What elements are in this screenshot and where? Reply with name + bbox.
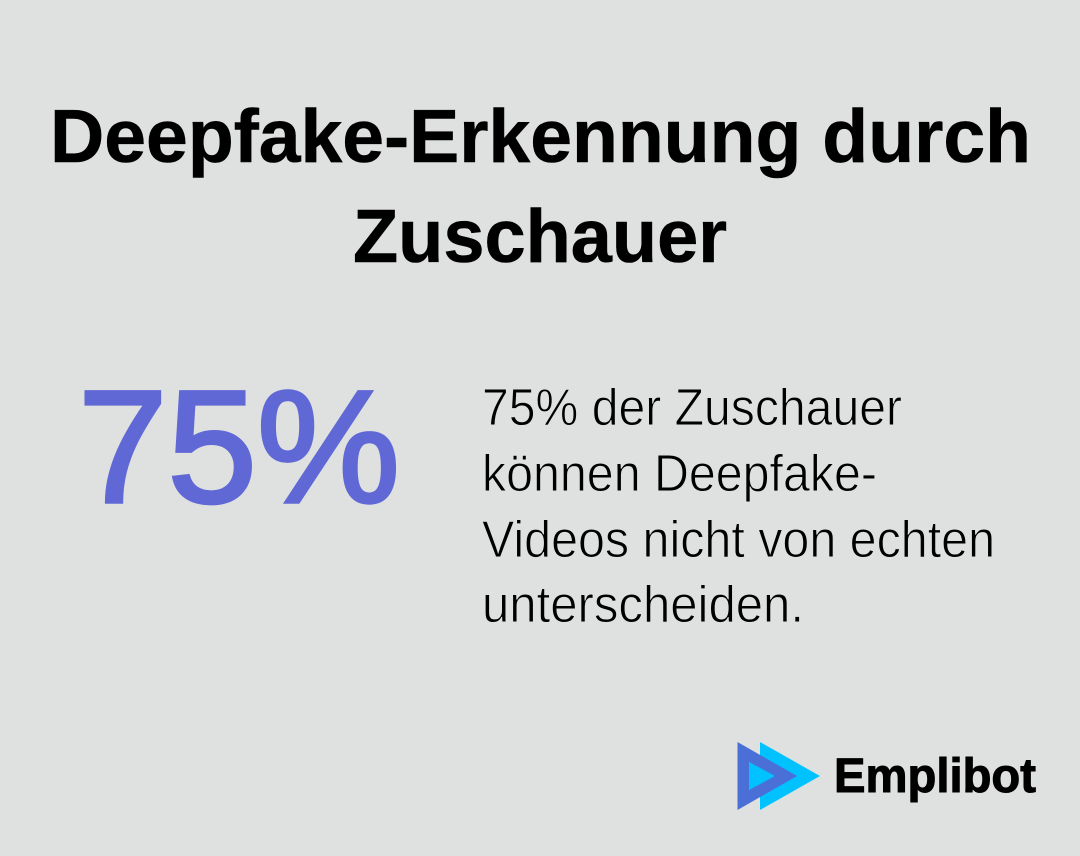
description text: 75% der Zuschauer [482,379,902,437]
title: Zuschauer [353,194,727,278]
logo wordmark: Emplibot [834,750,1036,803]
description text [482,379,995,634]
big statistic: 75%: 75% [78,357,400,536]
description text: unterscheiden. [482,576,804,634]
logo: Emplibot [738,742,1036,810]
description text: Videos nicht von echten [482,511,995,569]
title [50,94,1031,278]
icon: play triangles [738,742,820,810]
description text: können Deepfake- [482,445,877,503]
title: Deepfake-Erkennung durch [50,94,1031,178]
